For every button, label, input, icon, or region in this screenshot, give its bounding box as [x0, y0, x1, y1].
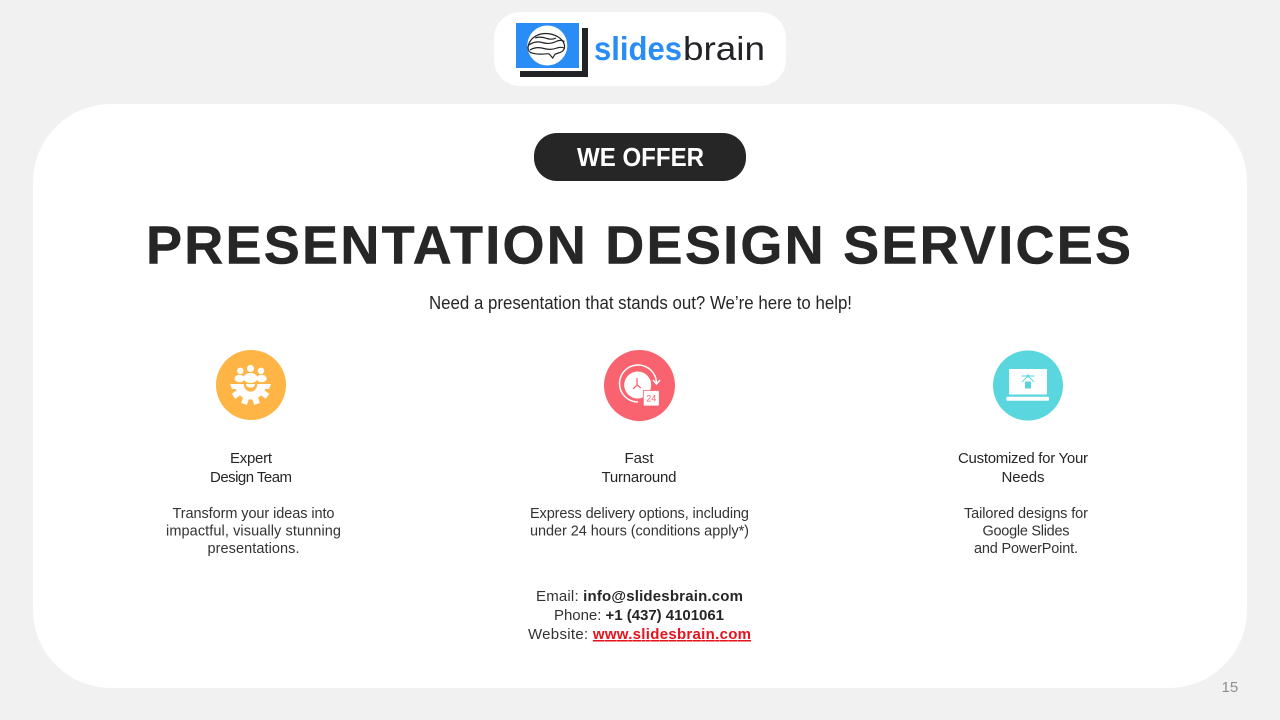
logo mark: [516, 23, 588, 77]
title: PRESENTATION DESIGN SERVICES: [146, 216, 1131, 276]
phone: Phone: +1 (437) 4101061: [554, 607, 724, 624]
heading: Expert: [230, 450, 273, 467]
logo badge: [494, 12, 786, 86]
subtitle: Need a presentation that stands out? We’re here to help!: [429, 293, 852, 313]
column: fast turnaround: [530, 350, 749, 540]
logo wordmark: slides: [594, 30, 682, 67]
description: Express delivery options, including: [530, 506, 749, 522]
page number: 15: [1222, 679, 1238, 696]
description: Google Slides: [982, 524, 1070, 540]
column: expert design team: [166, 350, 341, 557]
badge: we offer: [534, 133, 746, 181]
description: and PowerPoint.: [974, 541, 1078, 557]
heading: Design Team: [210, 469, 292, 486]
main panel: [33, 104, 1247, 688]
contact details: [528, 588, 751, 643]
badge: we offer: WE OFFER: [577, 142, 704, 172]
website: Website: www.slidesbrain.com: [528, 626, 751, 643]
description: Transform your ideas into: [172, 506, 334, 522]
icon: 24 hour clock: 24: [646, 394, 656, 404]
heading: Turnaround: [602, 469, 676, 486]
heading: Fast: [624, 450, 654, 467]
icon: team gear: [216, 350, 286, 420]
email: Email: info@slidesbrain.com: [536, 588, 743, 605]
heading: Needs: [1002, 469, 1044, 486]
description: impactful, visually stunning: [166, 524, 341, 540]
description: Tailored designs for: [964, 506, 1088, 522]
heading: Customized for Your: [958, 450, 1088, 467]
icon: 24 hour clock: [604, 350, 675, 421]
logo wordmark: brain: [683, 30, 765, 67]
column: customized: [958, 350, 1088, 557]
description: under 24 hours (conditions apply*): [530, 524, 749, 540]
description: presentations.: [208, 541, 300, 557]
icon: laptop with design: [993, 350, 1063, 420]
